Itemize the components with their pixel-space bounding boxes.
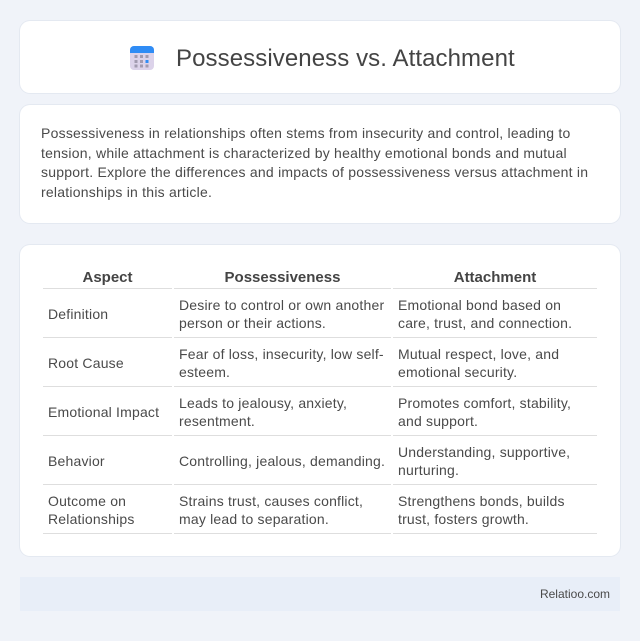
row: root cause: esteem.	[179, 364, 230, 380]
row: definition: person or their actions.	[179, 315, 326, 331]
row: outcome on relationships: may lead to separation.	[179, 511, 329, 527]
intro text: Possessiveness in relationships often stems from insecurity and control, leading to	[41, 125, 571, 141]
row: emotional impact: Leads to jealousy, anxiety,	[179, 395, 347, 411]
row: behavior: nurturing.	[398, 462, 459, 478]
row: outcome on relationships: Relationships	[48, 511, 135, 527]
icon: calendar	[130, 46, 154, 70]
row: outcome on relationships: Outcome on	[48, 493, 126, 509]
row: emotional impact: Promotes comfort, stability,	[398, 395, 571, 411]
intro text: relationships in this article.	[41, 184, 212, 200]
row: emotional impact	[48, 395, 571, 429]
row: outcome on relationships: Strains trust, causes conflict,	[179, 493, 363, 509]
table card	[20, 245, 620, 556]
row: root cause: Root Cause	[48, 355, 124, 371]
column headers: Aspect	[82, 269, 133, 286]
row: outcome on relationships	[48, 493, 565, 527]
row: outcome on relationships: Strengthens bonds, builds	[398, 493, 565, 509]
intro text: tension, while attachment is characterized by healthy emotional bonds and mutual	[41, 144, 567, 160]
row: behavior	[48, 444, 570, 478]
row: root cause: Fear of loss, insecurity, low self-	[179, 346, 384, 362]
row: definition: Desire to control or own another	[179, 297, 384, 313]
row: emotional impact: resentment.	[179, 413, 255, 429]
intro text	[41, 125, 588, 200]
row: root cause	[48, 346, 559, 380]
column headers: Attachment	[454, 269, 536, 286]
row: definition: care, trust, and connection.	[398, 315, 572, 331]
row: behavior: Understanding, supportive,	[398, 444, 570, 460]
row: emotional impact: and support.	[398, 413, 478, 429]
row: outcome on relationships: trust, fosters growth.	[398, 511, 529, 527]
intro text: support. Explore the differences and impacts of possessiveness versus attachment in	[41, 164, 588, 180]
footer bar	[20, 577, 620, 611]
row: root cause: Mutual respect, love, and	[398, 346, 559, 362]
row: behavior: Behavior	[48, 453, 105, 469]
header card	[20, 21, 620, 93]
column headers	[82, 269, 536, 286]
row: definition	[48, 297, 572, 331]
row: root cause: emotional security.	[398, 364, 517, 380]
row: definition: Definition	[48, 306, 108, 322]
row: emotional impact: Emotional Impact	[48, 404, 159, 420]
title: Possessiveness vs. Attachment	[176, 45, 515, 72]
intro card	[20, 105, 620, 223]
column headers: Possessiveness	[225, 269, 340, 286]
footer credit: Relatioo.com	[540, 587, 610, 601]
row: definition: Emotional bond based on	[398, 297, 561, 313]
row: behavior: Controlling, jealous, demanding.	[179, 453, 385, 469]
